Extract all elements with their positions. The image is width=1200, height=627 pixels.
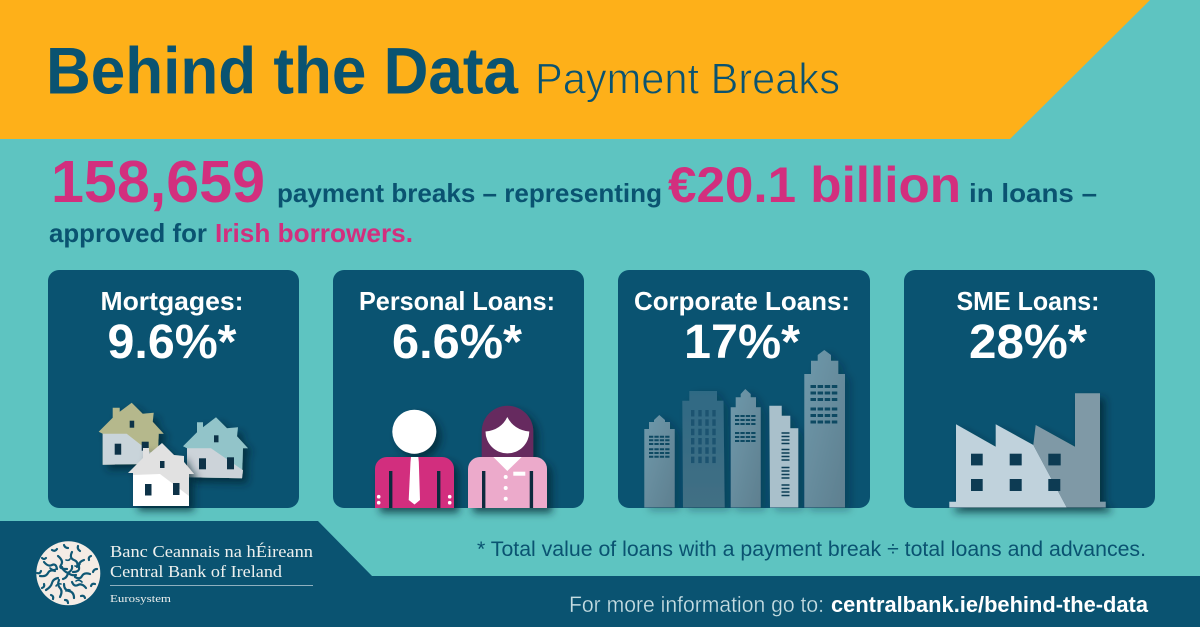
headline statistics: in loans – — [969, 178, 1097, 208]
building 5 — [804, 350, 845, 508]
icon: man — [375, 410, 454, 508]
footnote: * Total value of loans with a payment break ÷ total loans and advances. — [477, 538, 1146, 561]
logo: central bank of ireland: Central Bank of Ireland — [110, 562, 283, 581]
heading: mortgages: Mortgages: — [100, 286, 244, 316]
building 4 — [769, 406, 798, 508]
icon: logo globe — [36, 541, 100, 605]
text: bank name: Banc Ceannais na hÉireann — [110, 542, 313, 561]
figure: corporate loans share: 17%* — [684, 316, 800, 369]
headline statistics: payment breaks – representing — [277, 178, 662, 208]
icon: factory — [949, 393, 1106, 508]
footer link: centralbank.ie/behind-the-data — [831, 592, 1149, 617]
header banner — [0, 0, 1150, 139]
footer link — [569, 592, 1149, 617]
heading: personal loans: Personal Loans: — [359, 286, 555, 316]
headline statistics: Irish borrowers. — [215, 218, 413, 248]
building 1 — [644, 415, 675, 508]
title — [46, 34, 840, 108]
heading: corporate loans: Corporate Loans: — [634, 286, 850, 316]
footer link: For more information go to: — [569, 592, 824, 617]
headline statistics: €20.1 billion — [668, 157, 961, 213]
icon: city buildings — [644, 350, 845, 508]
building 2 — [682, 391, 725, 508]
footer band — [0, 521, 1200, 627]
figure: sme loans share: 28%* — [969, 316, 1087, 369]
headline statistics: 158,659 — [51, 149, 265, 215]
figure: personal loans share: 6.6%* — [392, 316, 522, 369]
panel: sme loans — [904, 270, 1155, 508]
building 3 — [731, 389, 761, 508]
heading: sme loans: SME Loans: — [956, 286, 1100, 316]
panel: corporate loans — [618, 270, 870, 508]
headline statistics — [49, 149, 1097, 248]
title: Behind the Data — [46, 34, 519, 108]
panel: personal loans — [333, 270, 584, 508]
panel: mortgages — [48, 270, 299, 508]
title: Payment Breaks — [535, 55, 840, 103]
headline statistics: approved for — [49, 218, 207, 248]
icon: woman — [468, 406, 547, 508]
icon: houses — [99, 403, 248, 506]
figure: mortgages share: 9.6%* — [108, 316, 237, 369]
logo: central bank of ireland — [36, 541, 313, 605]
text: eurosystem: Eurosystem — [110, 593, 172, 605]
